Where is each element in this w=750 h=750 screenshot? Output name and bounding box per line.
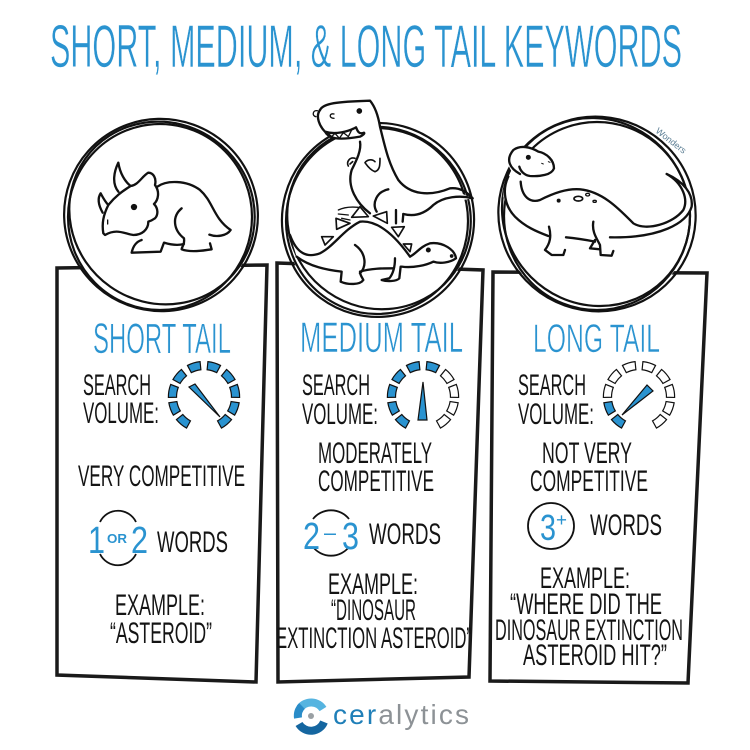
example text xyxy=(276,568,472,655)
search volume label: SEARCH xyxy=(518,369,586,402)
example text: EXTINCTION ASTEROID” xyxy=(276,622,472,655)
icon: logo mark xyxy=(298,702,324,731)
word count: 3 plus: + xyxy=(556,510,567,530)
word count: 2 to 3: 3 xyxy=(342,516,359,558)
panel: medium tail xyxy=(276,263,483,682)
signature: Wonders xyxy=(654,126,689,156)
competition text: MODERATELY xyxy=(318,437,432,470)
competition text: COMPETITIVE xyxy=(530,465,648,498)
competition text xyxy=(318,437,434,498)
competition text xyxy=(530,437,648,498)
circle: triceratops xyxy=(33,85,291,341)
example text: “ASTEROID” xyxy=(110,617,212,650)
search volume label: VOLUME: xyxy=(518,398,594,431)
word count: 3 plus: WORDS xyxy=(590,509,662,542)
example text: EXAMPLE: xyxy=(115,589,205,622)
icon: t-rex xyxy=(313,101,473,223)
example text xyxy=(110,589,212,650)
search volume label xyxy=(518,369,594,431)
word count: 2 to 3: – xyxy=(324,520,337,545)
example text xyxy=(495,562,683,672)
word count: 3 plus xyxy=(528,503,662,549)
example text: “DINOSAUR xyxy=(331,594,416,627)
word count: 1 or 2: 1 xyxy=(88,520,105,562)
heading: medium tail: MEDIUM TAIL xyxy=(300,314,463,362)
gauge: low search volume xyxy=(603,361,675,429)
search volume label: VOLUME: xyxy=(83,397,159,430)
word count: 2 to 3: 2 xyxy=(303,516,320,558)
competition text: NOT VERY xyxy=(542,437,632,470)
wordmark: ceralytics xyxy=(333,699,469,730)
panel: long tail xyxy=(490,272,707,683)
search volume label xyxy=(83,369,159,430)
logo: ceralytics xyxy=(298,699,469,731)
circle: long-neck dinosaur xyxy=(463,79,729,345)
search volume label: VOLUME: xyxy=(302,398,378,431)
search volume label xyxy=(302,369,378,431)
example text: EXAMPLE: xyxy=(540,562,630,595)
icon: triceratops xyxy=(99,163,231,253)
icon: long-neck dinosaur xyxy=(503,147,692,256)
word count: 1 or 2: WORDS xyxy=(157,526,228,559)
icon: stegosaurus xyxy=(290,207,456,284)
word count: 1 or 2 xyxy=(88,511,228,565)
gauge: medium search volume xyxy=(387,361,459,429)
example text: EXAMPLE: xyxy=(328,568,418,601)
word count: 1 or 2: 2 xyxy=(131,520,148,562)
circle: t-rex and stegosaurus xyxy=(250,89,508,347)
word count: 1 or 2: OR xyxy=(107,531,128,546)
competition text: COMPETITIVE xyxy=(318,465,434,498)
gauge: high search volume xyxy=(168,361,240,429)
word count: 2 to 3: WORDS xyxy=(369,518,441,551)
panel: short tail xyxy=(57,265,267,682)
search volume label: SEARCH xyxy=(83,369,151,402)
heading: long tail: LONG TAIL xyxy=(533,317,660,361)
word count: 3 plus: 3 xyxy=(540,507,556,548)
competition text: VERY COMPETITIVE xyxy=(78,460,245,493)
word count: 2 to 3 xyxy=(303,510,441,558)
heading: short tail: SHORT TAIL xyxy=(93,315,231,363)
search volume label: SEARCH xyxy=(302,369,370,402)
